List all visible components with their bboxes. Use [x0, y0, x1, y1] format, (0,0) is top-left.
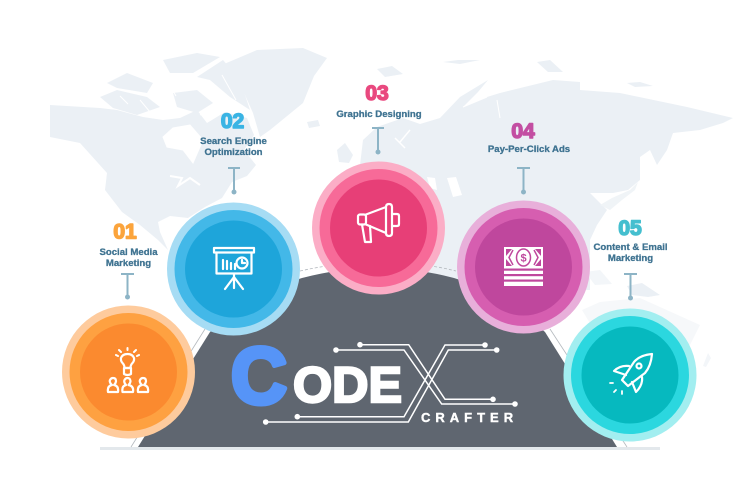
label 01: Social Media	[99, 247, 158, 258]
world map background	[50, 48, 733, 367]
icon: banknote stack: $	[520, 252, 527, 264]
floor shadow	[100, 447, 660, 450]
label 03	[336, 82, 422, 154]
label 01: Marketing	[106, 258, 151, 269]
logo letter C: C	[231, 331, 287, 420]
label 01: 01	[113, 220, 137, 244]
label 03: Graphic Designing	[336, 109, 422, 120]
dome	[138, 268, 617, 447]
label 02	[200, 110, 267, 194]
label 05: 05	[618, 217, 642, 240]
label 05: Content & Email	[593, 242, 668, 253]
circle 2: search engine optimization	[167, 202, 300, 336]
map inland water details	[120, 75, 500, 197]
label 03: 03	[365, 82, 389, 105]
label 05	[593, 217, 668, 300]
icon: megaphone	[358, 204, 399, 242]
logo: Code X Crafter	[231, 331, 518, 425]
logo X circuit lines	[263, 342, 518, 425]
circle 3: graphic designing	[312, 162, 445, 294]
dome outline	[131, 262, 627, 447]
circle 1: social media marketing	[62, 306, 195, 438]
logo letters ODE: ODE	[293, 357, 402, 413]
label 02: 02	[221, 110, 244, 133]
label 04: Pay-Per-Click Ads	[488, 144, 570, 155]
label 05: Marketing	[608, 253, 653, 264]
icon: light bulb and people	[108, 348, 148, 392]
circle 4: pay-per-click ads	[457, 200, 590, 334]
label 04: 04	[511, 120, 535, 143]
label 02: Search Engine	[200, 136, 267, 147]
label 04	[488, 120, 570, 194]
circle 5: content and email marketing	[564, 308, 696, 442]
logo word CRAFTER: CRAFTER	[421, 410, 518, 425]
label 01	[99, 220, 158, 300]
label 02: Optimization	[204, 147, 263, 158]
icon: presentation board	[214, 248, 254, 289]
icon: rocket	[610, 354, 652, 394]
